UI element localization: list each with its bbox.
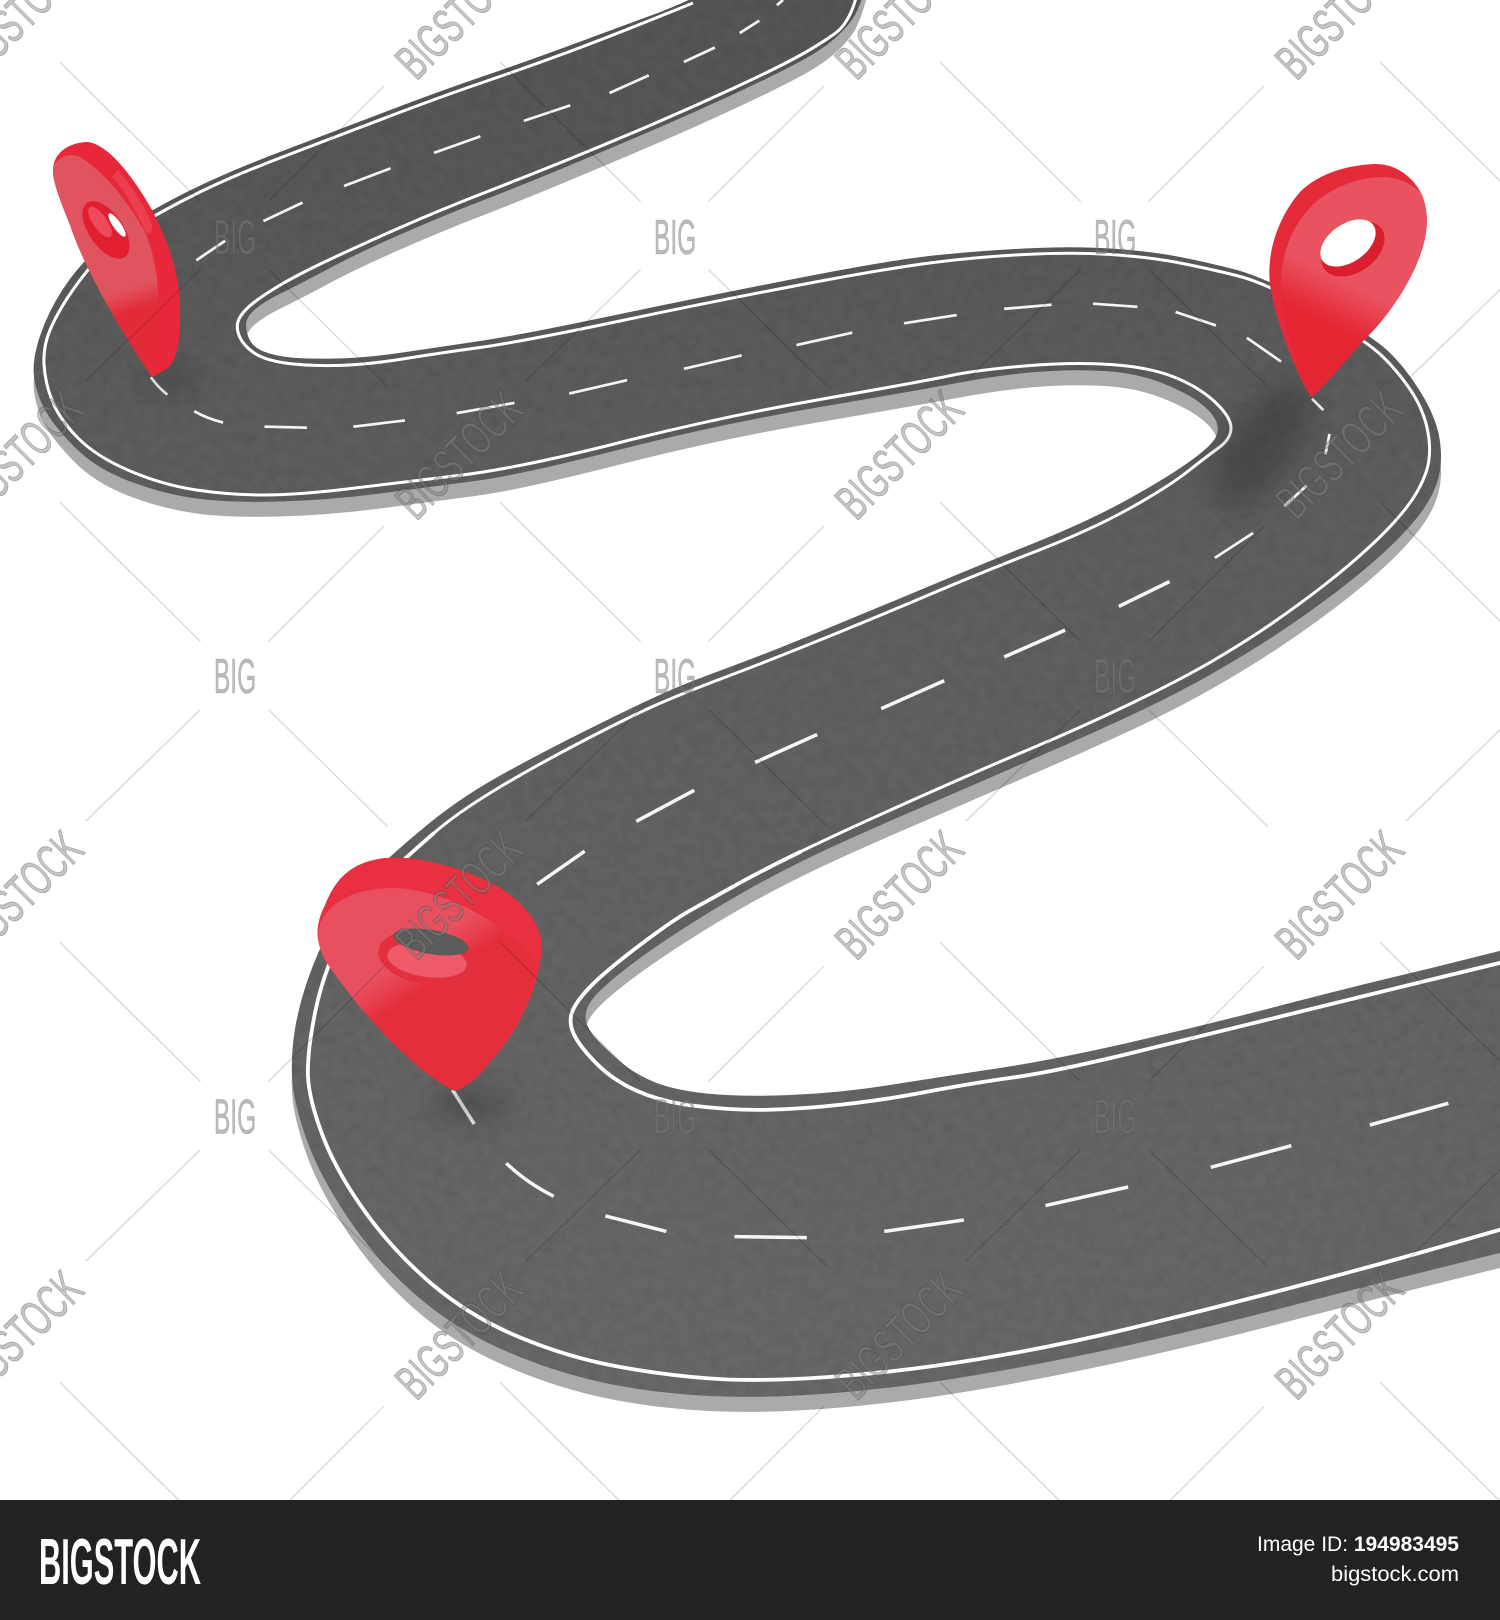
footer image id: Image ID: 194983495 [1257,1533,1459,1556]
road edge line: left side [44,3,1231,833]
watermark: BIG marks: BIG [214,1088,256,1144]
watermark: BIGSTOCK marks: BIGSTOCK [1265,1260,1414,1410]
watermark: BIG marks: BIG [654,209,696,265]
footer bar [0,1500,1500,1620]
watermark: BIGSTOCK marks: BIGSTOCK [1265,380,1414,529]
watermark: BIGSTOCK marks: BIGSTOCK [825,380,974,529]
watermark: BIGSTOCK marks: BIGSTOCK [385,380,534,529]
watermark: BIGSTOCK marks: BIGSTOCK [825,1260,974,1410]
map pin: top right [1269,164,1427,396]
watermark: BIG marks: BIG [214,209,256,265]
watermark: BIGSTOCK marks: BIGSTOCK [385,1260,534,1410]
centre line dashes, far sections [151,0,1330,558]
watermark: BIG marks: BIG [214,648,256,704]
centre line dashes, near sections [452,582,1448,1238]
watermarks: BIG [1094,1088,1136,1144]
road edge line: lower right [571,852,1500,1110]
watermark: BIG marks: BIG [654,648,696,704]
footer site address: bigstock.com [1331,1563,1459,1586]
watermark: BIGSTOCK marks: BIGSTOCK [825,820,974,970]
watermarks: BIG [1094,648,1136,704]
map pin: lower left [318,858,542,1091]
footer bar: BIGSTOCK [39,1525,201,1598]
watermark: BIGSTOCK marks: BIGSTOCK [385,820,534,970]
watermark: BIG marks: BIG [654,1088,696,1144]
map pin: top left [53,142,180,377]
pin shadows [146,366,1329,1123]
watermark: BIGSTOCK marks: BIGSTOCK [1265,820,1414,970]
watermarks: BIG [1094,209,1136,265]
watermark: BIG marks [214,209,1136,1144]
road edge line: right side [237,0,1430,852]
road edge line: lower left [308,833,1500,1380]
